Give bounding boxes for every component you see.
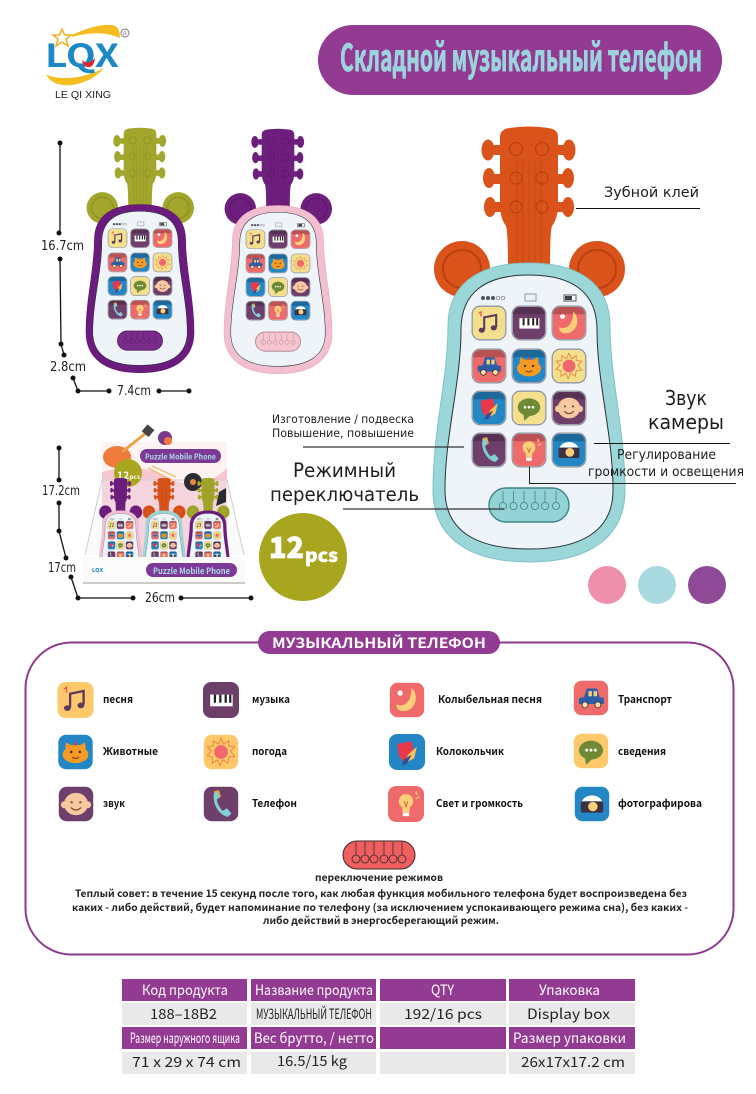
title banner (318, 25, 722, 95)
legend: music: музыка (252, 692, 290, 707)
phone dimensions (41, 140, 192, 399)
display box with twelve phones: LQX (92, 568, 103, 574)
legend: music (203, 682, 290, 718)
display box dimensions: 17.2cm (42, 483, 80, 499)
legend: photography: фотографирова (618, 796, 702, 811)
callout: camera sound: камеры (648, 410, 724, 434)
purple and pink phone (224, 129, 332, 374)
warm tip text: каких - либо действий, будет напоминание по телефону (за исключением успокаивающего режима сна), без каких - (72, 899, 688, 914)
callout: teether (576, 185, 700, 208)
logo: LQX Le Qi Xing: LE QI XING (55, 90, 111, 101)
logo: LQX Le Qi Xing: R (123, 32, 127, 38)
phone dimensions: 2.8cm (50, 359, 86, 375)
legend: animals: Животные (103, 744, 158, 759)
product specification table: Размер упаковки (513, 1028, 626, 1048)
product specification table: Display box (527, 1004, 610, 1024)
product specification table: QTY (431, 980, 455, 1000)
product specification table: МУЗЫКАЛЬНЫЙ ТЕЛЕФОН (256, 1004, 372, 1024)
main teal phone with orange teether (433, 126, 625, 562)
product specification table: Вес брутто, / нетто (254, 1028, 374, 1048)
callout: teether: Зубной клей (604, 185, 699, 201)
badge: 12 pcs: pcs (305, 542, 338, 568)
badge: 12 pcs: 12 (269, 525, 304, 567)
legend: messages: сведения (618, 744, 666, 759)
callout: mode switch: Режимный (293, 459, 396, 482)
legend: transport: Транспорт (618, 692, 672, 707)
display box with twelve phones: 12pcs (117, 467, 140, 482)
callout: mode switch (270, 459, 504, 509)
panel heading (258, 631, 500, 654)
product specification table: 192/16 pcs (404, 1004, 482, 1024)
callout: making and hanging: Повышение, повышение (272, 426, 414, 440)
legend: weather: погода (252, 744, 287, 759)
legend: transport (574, 681, 672, 715)
display box with twelve phones: Puzzle Mobile Phone (145, 452, 216, 462)
callout: making and hanging (272, 412, 464, 447)
callout: volume and light: громкости и освещения (588, 464, 744, 480)
legend: lullaby: Колыбельная песня (438, 692, 542, 707)
product specification table: Размер наружного ящика (130, 1028, 240, 1048)
warm tip text: либо действий в энергосберегающий режим. (263, 912, 499, 927)
legend: sound (59, 787, 126, 821)
olive and purple phone (86, 128, 194, 373)
callout: making and hanging: Изготовление / подвеска (272, 412, 414, 426)
callout: camera sound (594, 386, 730, 444)
display box dimensions (42, 446, 254, 606)
warm tip text: Теплый совет: в течение 15 секунд после того, как любая функция мобильного телефона будет воспроизведена без (75, 885, 687, 900)
legend: bell (389, 734, 505, 770)
display box dimensions: 17cm (48, 560, 76, 576)
legend: weather (204, 735, 287, 769)
warm tip text (72, 885, 688, 927)
legend: messages (574, 734, 666, 768)
badge: 12 pcs (259, 513, 347, 601)
display box dimensions: 26cm (145, 590, 175, 606)
phone dimensions: 7.4cm (117, 383, 151, 399)
product specification table: 16.5/15 kg (277, 1051, 347, 1071)
legend: phone: Телефон (252, 796, 297, 811)
legend: light and volume: Свет и громкость (436, 796, 523, 811)
logo: LQX Le Qi Xing (45, 25, 129, 101)
logo: LQX Le Qi Xing: LQX (45, 31, 119, 77)
panel heading: МУЗЫКАЛЬНЫЙ ТЕЛЕФОН (272, 633, 486, 653)
mode switch caption: переключение режимов (315, 869, 443, 884)
legend: lullaby (390, 683, 542, 717)
colour swatches (588, 566, 726, 604)
legend: photography (575, 787, 702, 821)
panel: musical phone functions (26, 631, 734, 954)
product specification table: 26x17x17.2 cm (521, 1052, 625, 1072)
product specification table: Код продукта (142, 980, 228, 1000)
callout: camera sound: Звук (665, 386, 707, 410)
display box with twelve phones (83, 424, 245, 583)
callout: mode switch: переключатель (270, 483, 419, 506)
product specification table: 71 x 29 x 74 cm (132, 1052, 241, 1072)
legend: light and volume (388, 786, 523, 822)
legend: bell: Колокольчик (436, 744, 505, 759)
callout: volume and light: Регулирование (617, 447, 716, 463)
legend: song: песня (103, 692, 133, 707)
legend: animals (58, 735, 158, 769)
product specification table (122, 979, 635, 1074)
legend: phone (204, 787, 297, 821)
product specification table: 188–18B2 (150, 1004, 217, 1024)
callout: volume and light (530, 447, 744, 484)
phone dimensions: 16.7cm (41, 238, 84, 254)
legend: sound: звук (103, 796, 126, 811)
product specification table: Название продукта (255, 980, 373, 1000)
icon: mode switch (343, 841, 415, 869)
display box with twelve phones: Puzzle Mobile Phone (153, 565, 230, 577)
product specification table: Упаковка (539, 980, 600, 1000)
legend: song (58, 682, 133, 718)
